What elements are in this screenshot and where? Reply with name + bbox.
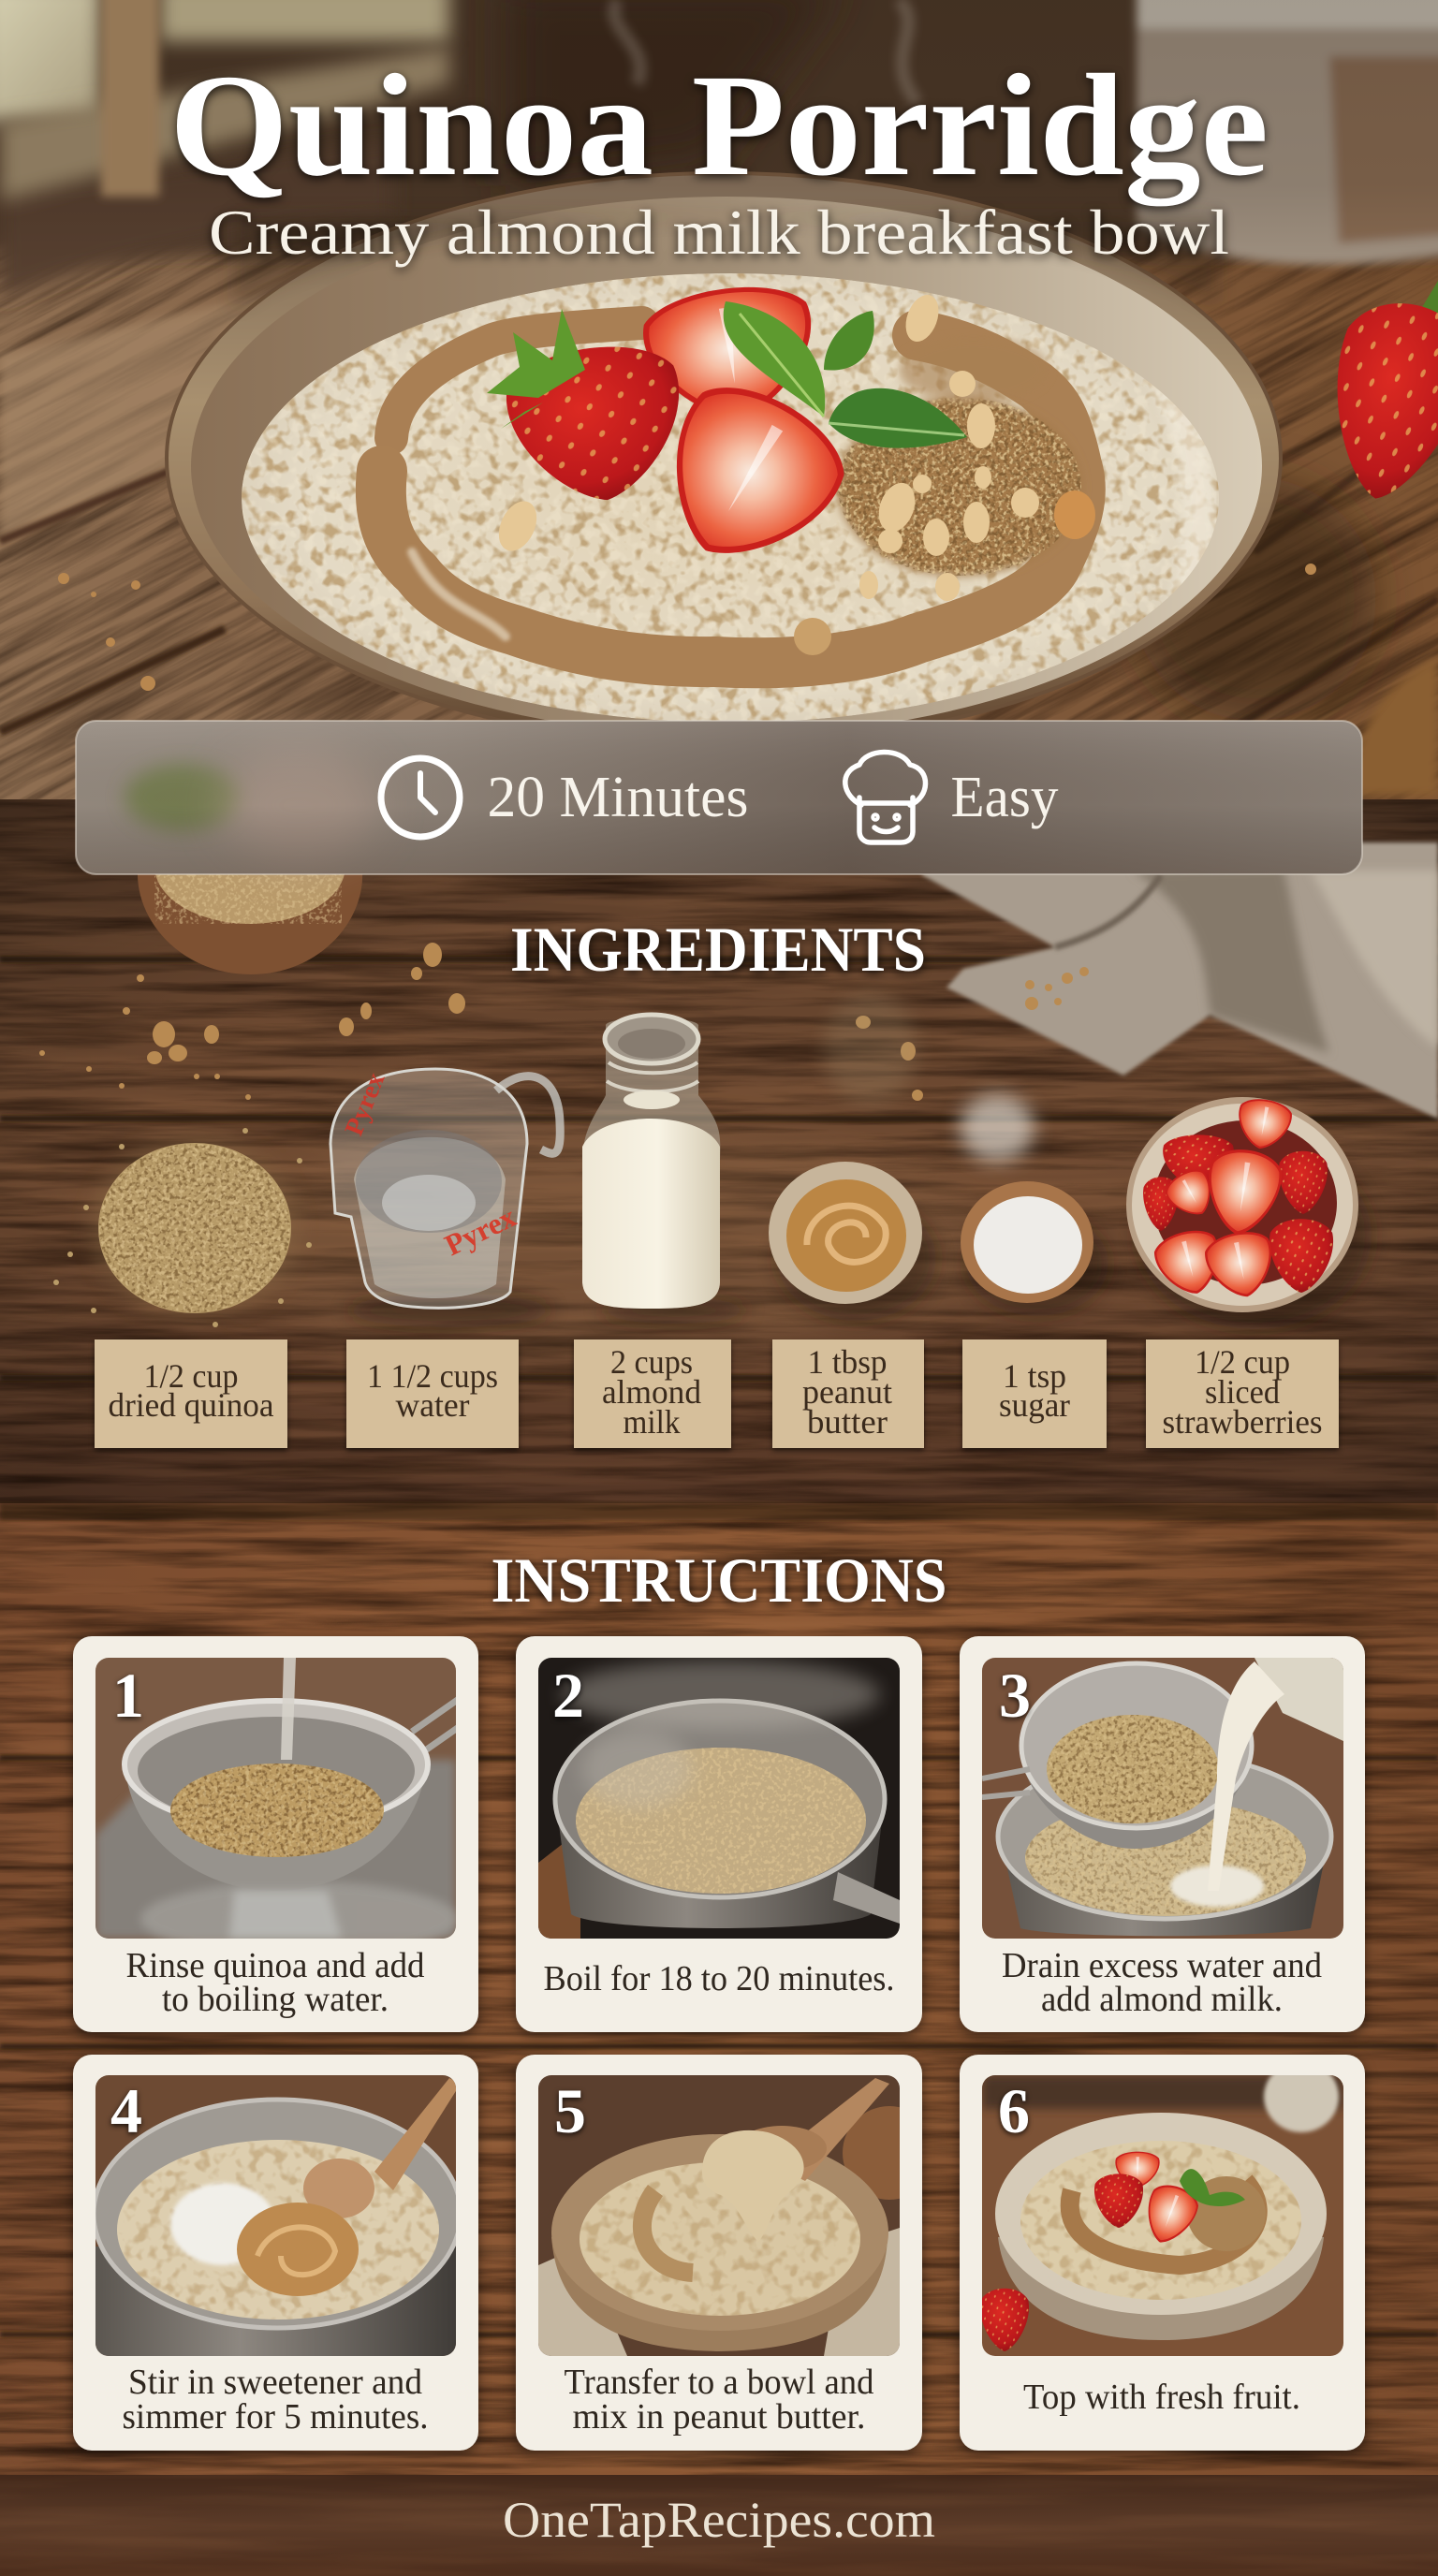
step 1 image: rinsing quinoa xyxy=(95,1658,459,1956)
difficulty: Easy xyxy=(951,766,1058,829)
step 6 card xyxy=(960,2055,1365,2451)
title: Quinoa Porridge xyxy=(169,44,1269,207)
glass of milk background xyxy=(1137,0,1438,264)
label: peanut butter: 1 tbsp xyxy=(807,1343,888,1381)
label: sugar: sugar xyxy=(999,1386,1070,1424)
ingredient: quinoa pile xyxy=(53,1128,312,1327)
label: quinoa xyxy=(95,1339,287,1448)
step 3 text: Drain excess water and xyxy=(1002,1946,1322,1985)
label: water: 1 1/2 cups xyxy=(367,1357,498,1395)
ingredients section background xyxy=(0,799,1438,1503)
footer website: OneTapRecipes.com xyxy=(503,2492,935,2548)
step 5 number: 5 xyxy=(554,2075,586,2146)
step 3 card xyxy=(960,1636,1365,2032)
step 2 image: boiling pot xyxy=(538,1658,900,1939)
step 4 text xyxy=(122,2363,429,2437)
step 1 text: to boiling water. xyxy=(162,1980,389,2019)
label: quinoa: 1/2 cup xyxy=(144,1357,238,1395)
step 1 text: Rinse quinoa and add xyxy=(125,1946,425,1985)
step 5 image: transfer to bowl xyxy=(538,2075,936,2356)
step 6 image: finished bowl xyxy=(980,2061,1343,2356)
strawberries and mint xyxy=(487,277,967,593)
ingredient labels xyxy=(95,1339,1339,1448)
bowl xyxy=(167,173,1281,744)
step 3 image: adding almond milk xyxy=(982,1658,1343,1939)
label: peanut butter: peanut xyxy=(802,1373,892,1411)
cloth napkin xyxy=(922,842,1438,1119)
label: strawberries xyxy=(1146,1339,1339,1448)
step 5 text: mix in peanut butter. xyxy=(573,2397,865,2437)
nut topping xyxy=(492,290,1095,655)
peanut butter swirl xyxy=(381,323,1080,663)
step 4 card xyxy=(73,2055,478,2451)
step 1 text xyxy=(125,1946,425,2019)
ingredient: measuring cup of water xyxy=(330,1069,560,1327)
instructions heading: INSTRUCTIONS xyxy=(491,1544,947,1616)
step 4 text: Stir in sweetener and xyxy=(128,2363,422,2402)
label: almond milk xyxy=(574,1339,731,1448)
label: sugar: 1 tsp xyxy=(1003,1357,1066,1395)
step 5 text: Transfer to a bowl and xyxy=(564,2363,874,2402)
subtitle: Creamy almond milk breakfast bowl xyxy=(209,197,1229,268)
step 3 text: add almond milk. xyxy=(1041,1980,1283,2019)
ingredient: strawberries bowl xyxy=(1126,1095,1372,1329)
label: water xyxy=(346,1339,519,1448)
step 2 card xyxy=(516,1636,922,2032)
ingredient: measuring cup of water: Pyrex xyxy=(439,1199,521,1262)
label: quinoa: dried quinoa xyxy=(109,1386,274,1424)
ingredient: milk bottle xyxy=(582,1015,749,1324)
step 1 number: 1 xyxy=(112,1660,144,1731)
step 1 card xyxy=(73,1636,478,2032)
label: strawberries: strawberries xyxy=(1163,1403,1322,1441)
label: peanut butter: butter xyxy=(807,1403,888,1441)
ingredient: sugar bowl xyxy=(961,1181,1108,1316)
step 6 number: 6 xyxy=(998,2075,1030,2146)
table planks xyxy=(0,246,1438,799)
label: strawberries: 1/2 cup xyxy=(1195,1343,1290,1381)
label: water: water xyxy=(395,1386,470,1424)
label: almond milk: almond xyxy=(602,1373,701,1411)
step 2 number: 2 xyxy=(552,1660,584,1731)
prep time: 20 Minutes xyxy=(487,766,749,829)
steam xyxy=(614,0,917,103)
ingredient: measuring cup of water: Pyrex xyxy=(340,1069,391,1140)
whole strawberry on table xyxy=(1337,281,1438,499)
scattered crumbs xyxy=(39,943,923,1101)
ingredients heading: INGREDIENTS xyxy=(510,914,926,985)
icon: clock xyxy=(381,758,460,837)
step 3 text xyxy=(1002,1946,1322,2019)
instructions section background xyxy=(0,1503,1438,2477)
ingredient: peanut butter bowl xyxy=(769,1162,936,1321)
icon: chef hat xyxy=(845,752,926,842)
step 3 number: 3 xyxy=(999,1660,1031,1731)
background wall xyxy=(0,0,1438,300)
step 5 text xyxy=(564,2363,874,2437)
hero section with porridge bowl xyxy=(0,0,1438,799)
step 4 number: 4 xyxy=(110,2075,142,2146)
step 2 text: Boil for 18 to 20 minutes. xyxy=(543,1959,895,1998)
step 6 text: Top with fresh fruit. xyxy=(1023,2378,1300,2417)
porridge xyxy=(242,271,1221,730)
step 4 text: simmer for 5 minutes. xyxy=(122,2397,429,2437)
crumbs on table xyxy=(58,564,1316,691)
label: almond milk: milk xyxy=(624,1403,680,1441)
label: strawberries: sliced xyxy=(1205,1373,1280,1411)
top-left ingredient bowl xyxy=(138,808,362,974)
label: almond milk: 2 cups xyxy=(610,1343,693,1381)
footer xyxy=(0,2475,1438,2576)
step 4 image: stirring xyxy=(94,2075,461,2356)
step 5 card xyxy=(516,2055,936,2451)
spilled sugar xyxy=(824,992,1034,1162)
background window xyxy=(0,0,449,201)
hero info panel xyxy=(76,721,1362,874)
label: peanut butter xyxy=(772,1339,924,1448)
label: sugar xyxy=(962,1339,1107,1448)
